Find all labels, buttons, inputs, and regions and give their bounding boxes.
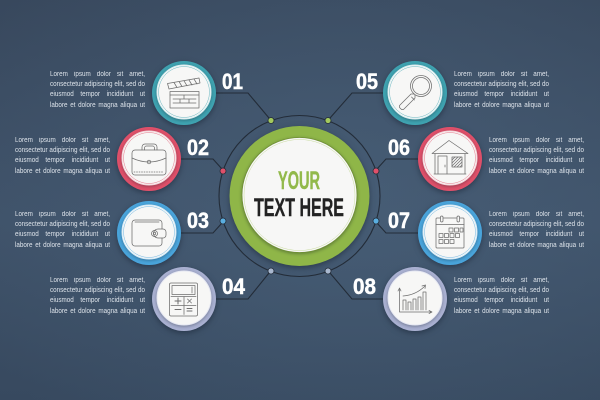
text 02: eiusmod tempor incididunt ut [15, 157, 110, 164]
hub title [254, 167, 344, 222]
item 03 [15, 201, 226, 269]
badge 02: 02 [187, 135, 209, 160]
text 06: eiusmod tempor incididunt ut [489, 157, 584, 164]
text 04: Lorem ipsum dolor sit amet, [50, 277, 145, 284]
hub title: YOUR [278, 167, 320, 195]
badge 03: 03 [187, 208, 209, 233]
item 07 [372, 201, 584, 269]
hub circle [230, 126, 370, 266]
text 06: Lorem ipsum dolor sit amet, [489, 137, 584, 144]
text 05: Lorem ipsum dolor sit amet, [454, 71, 549, 78]
item 02 [15, 127, 226, 195]
text 07 [489, 211, 584, 249]
text 08 [454, 277, 549, 315]
text 01: Lorem ipsum dolor sit amet, [50, 71, 145, 78]
text 07: Lorem ipsum dolor sit amet, [489, 211, 584, 218]
text 05 [454, 71, 549, 109]
text 06 [489, 137, 584, 175]
badge 07: 07 [388, 208, 410, 233]
text 03: eiusmod tempor incididunt ut [15, 231, 110, 238]
text 03: Lorem ipsum dolor sit amet, [15, 211, 110, 218]
text 08: eiusmod tempor incididunt ut [454, 297, 549, 304]
badge 05: 05 [356, 69, 378, 94]
item 06 [372, 127, 584, 195]
text 01: eiusmod tempor incididunt ut [50, 91, 145, 98]
text 02: consectetur adipiscing elit, sed do [15, 147, 110, 154]
text 07: consectetur adipiscing elit, sed do [489, 221, 584, 228]
text 07: eiusmod tempor incididunt ut [489, 231, 584, 238]
badge 04: 04 [222, 274, 246, 299]
badge 06: 06 [388, 135, 410, 160]
ring [219, 116, 380, 276]
text 08: Lorem ipsum dolor sit amet, [454, 277, 549, 284]
text 04: eiusmod tempor incididunt ut [50, 297, 145, 304]
text 04: labore et dolore magna aliqua ut [50, 308, 145, 315]
text 03: consectetur adipiscing elit, sed do [15, 221, 110, 228]
text 07: labore et dolore magna aliqua ut [489, 242, 584, 249]
badge 08: 08 [353, 274, 376, 299]
text 04 [50, 277, 145, 315]
text 01 [50, 71, 145, 109]
text 03: labore et dolore magna aliqua ut [15, 242, 110, 249]
text 05: eiusmod tempor incididunt ut [454, 91, 549, 98]
text 02 [15, 137, 110, 175]
text 08: consectetur adipiscing elit, sed do [454, 287, 549, 294]
text 01: consectetur adipiscing elit, sed do [50, 81, 145, 88]
text 06: consectetur adipiscing elit, sed do [489, 147, 584, 154]
item 01 [50, 61, 274, 129]
badge 01: 01 [222, 69, 243, 94]
text 02: Lorem ipsum dolor sit amet, [15, 137, 110, 144]
text 02: labore et dolore magna aliqua ut [15, 168, 110, 175]
item 05 [324, 61, 549, 129]
item 04 [50, 267, 274, 334]
item 08 [324, 267, 549, 334]
text 05: labore et dolore magna aliqua ut [454, 102, 549, 109]
text 01: labore et dolore magna aliqua ut [50, 102, 145, 109]
text 06: labore et dolore magna aliqua ut [489, 168, 584, 175]
text 08: labore et dolore magna aliqua ut [454, 308, 549, 315]
text 04: consectetur adipiscing elit, sed do [50, 287, 145, 294]
text 03 [15, 211, 110, 249]
text 05: consectetur adipiscing elit, sed do [454, 81, 549, 88]
hub title: TEXT HERE [254, 194, 344, 222]
